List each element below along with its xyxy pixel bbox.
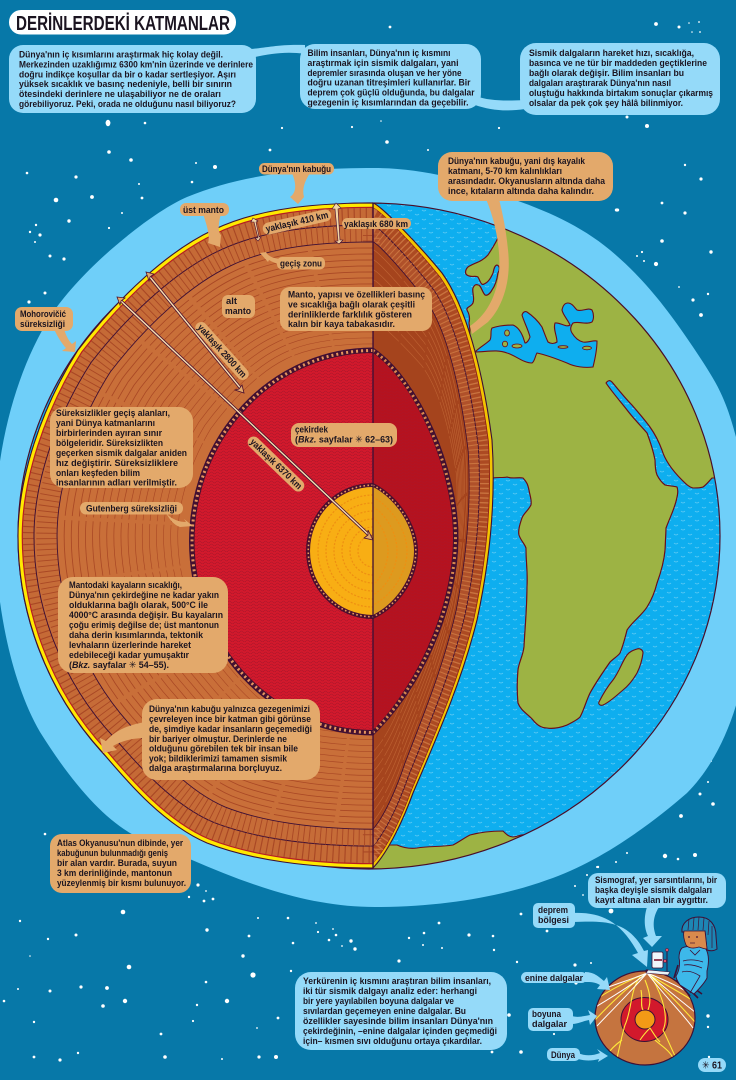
text block: Dünya'nın kabuğu kalınlık [438,152,613,334]
text block: Dünya'nın kabuğu bariyer: de, şimdiye kadar insanların geçemediği [149,723,312,734]
text block: Yerküre sismik dalgalar: için– kısmen sıvı olduğunu ortaya çıkardılar. [303,1035,482,1046]
callout: Gutenberg süreksizliği [80,502,193,527]
text block: intro 2: araştırmak için sismik dalgaları, yani [308,57,458,68]
text block: Dünya'nın kabuğu kalınlık: Dünya'nın kabuğu, yani dış kayalık [448,155,586,166]
callout: Mohorovičić süreksizliği: süreksizliği [20,318,65,329]
text block: intro 2: Bilim insanları, Dünya'nın iç kısmını [308,47,450,58]
arrow: 6370 km radius [117,297,373,540]
arrow: 680 km [332,203,343,244]
text block: intro 2: doğru uzanan titreşimleri kullanırlar. Bir [308,76,471,88]
callout: Mohorovičić süreksizliği [15,307,76,352]
label: yaklaşık 2800 km: yaklaşık 2800 km [196,322,249,380]
cutaway: right wedge [373,203,493,868]
text block: intro 3: olsalar da pek çok şey hâlâ bilinmiyor. [529,97,683,108]
label: çekirdek: (Bkz. sayfalar ✳ 62–63) [295,434,393,444]
text block: manto [280,287,432,331]
Madagascar [599,649,643,705]
text block: süreksizlikler: insanlarının adları verilmiştir. [56,476,177,488]
text block: Dünya'nın kabuğu kalınlık: ince, kıtaların altında daha kalındır. [448,185,594,196]
text block: mantodaki kayalar: olduklarına bağlı olarak, 500°C ile [69,599,208,610]
callout: Dünya [547,1048,608,1062]
text block: süreksizlikler: birbirlerinden ayıran sınır [56,427,162,438]
crossed arms and collar [682,950,703,993]
page number [698,1058,726,1072]
text block: intro 1: yüksek sıcaklık ve basınç nedeniyle, belli bir sınırın [19,78,232,89]
small earth diagram [594,969,695,1065]
text block: Yerküre sismik dalgalar [295,972,507,1050]
wedge lower mantle [373,242,469,829]
text block: Yerküre sismik dalgalar: iki tür sismik dalgayı analiz eder: herhangi [303,985,477,996]
text block: Dünya'nın kabuğu kalınlık: katmanı, 5-70 km kalınlıkları [448,165,562,176]
text block: mantodaki kayalar: çoğu erimiş değilse de; üst mantonun [69,619,219,630]
text block: Dünya'nın kabuğu bariyer: dalga araştırmalarına borçluyuz. [149,762,282,773]
text block: süreksizlikler [50,407,193,488]
inner core [635,1010,655,1029]
text block: manto: ve sıcaklığa bağlı olarak çeşitli [288,298,415,310]
text block: intro 3: Sismik dalgaların hareket hızı, sıcaklığa, [529,47,694,58]
text block: Atlas Okyanusu [50,834,191,893]
text block: manto: Manto, yapısı ve özellikleri basınç [288,288,425,300]
right outer core [373,353,453,730]
page number: ✳ 61 [702,1060,722,1072]
left inner core [310,487,373,615]
callout: geçiş zonu: geçiş zonu [280,258,322,268]
globe outline [18,203,720,869]
connector: intro bubbles 1 to 2 [250,45,305,58]
label: yaklaşık 680 km: yaklaşık 680 km [344,218,408,229]
title [9,10,236,35]
text block: Dünya'nın kabuğu bariyer: bir bariyer olmuştur. Derinlerde ne [149,733,287,744]
callout: üst manto [180,203,229,247]
text block: süreksizlikler: geçerken sismik dalgalar aniden [56,447,187,458]
wedge upper mantle ticks [373,217,484,854]
label: alt manto: alt [226,295,237,306]
text block: intro 1 [9,45,256,113]
cutaway: left hemisphere mantle [18,203,373,868]
text block: mantodaki kayalar: (Bkz. sayfalar ✳ 54–55). [69,659,169,670]
earth disc [595,971,695,1065]
callout: sismograf [588,873,726,947]
callout: boyuna dalgalar: dalgalar [532,1018,567,1029]
white S-waves [594,973,695,1028]
text block: intro 1: Dünya'nın iç kısımlarını araştırmak hiç kolay değil. [19,48,223,60]
hair [682,917,717,951]
connector: intro bubbles 2 to 3 [475,96,525,110]
text block: manto: kalın bir kaya tabakasıdır. [288,318,395,329]
epicentre dot [645,969,649,973]
outer core with Gutenberg boundary band [190,348,458,735]
text block: intro 3: basınca ve ne tür bir maddeden geçtiklerine [529,57,707,68]
text block: mantodaki kayalar [58,577,228,673]
label: çekirdek [291,423,397,447]
globe surface: oceans and continents [17,202,721,870]
label: yaklaşık 6370 km: yaklaşık 6370 km [248,436,305,491]
right inner core [373,487,414,615]
text block: mantodaki kayalar: Mantodaki kayaların sıcaklığı, [69,579,182,590]
text block: Dünya'nın kabuğu kalınlık: arasındadır. Okyanusların altında daha [448,175,606,186]
Antarctica [360,830,524,868]
callout: deprem bölgesi: bölgesi [538,914,569,925]
label: yaklaşık 410 km: yaklaşık 410 km [264,209,329,234]
label: çekirdek: çekirdek [295,424,329,434]
text block: intro 1: ötesindeki derinlere ne ulaşabiliyor ne de oraları [19,88,221,99]
text block: Dünya'nın kabuğu bariyer: yok; bildiklerimizi tamamen sismik [149,752,288,764]
left band [190,348,373,735]
callout: sismograf: kayıt altına alan bir aygıttır. [595,894,708,905]
text block: Dünya'nın kabuğu bariyer: çevreleyen ince bir katman gibi görünse [149,713,311,724]
callout: enine dalgalar: enine dalgalar [525,972,583,983]
Mediterranean and Black Sea [475,303,597,367]
callout: Mohorovičić süreksizliği: Mohorovičić [20,308,66,319]
callout: sismograf: başka deyişle sismik dalgaları [595,884,712,895]
text block: intro 2: depremler sırasında oluşan ve her yöne [308,67,462,78]
label: alt manto [222,295,255,318]
chair [674,965,702,998]
text block: süreksizlikler: onları keşfeden bilim [56,467,140,478]
callout: Gutenberg süreksizliği: Gutenberg süreksizliği [86,502,177,514]
text block: intro 3: dalgaları araştırarak Dünya'nın nasıl [529,77,671,88]
callout: boyuna dalgalar [528,1008,597,1031]
wedge crust [373,203,493,868]
continents: Europe, Asia, Africa [360,230,714,868]
inner core [306,483,418,619]
text block: mantodaki kayalar: levhaların üzerlerinde hareket [69,639,191,650]
callout: Dünya'nın kabuğu [259,163,334,204]
text block: Atlas Okyanusu: kabuğunun bulunmadığı geniş [57,847,168,858]
callout: Dünya'nın kabuğu: Dünya'nın kabuğu [262,163,331,174]
text block: Yerküre sismik dalgalar: bir yere yayılabilen boyuna dalgalar ve [303,995,454,1006]
crust [18,203,373,868]
arrow: 2800 km mantle depth [146,272,244,393]
right band [373,348,458,735]
callout: sismograf: Sismograf, yer sarsıntılarını, bir [595,874,717,885]
Mediterranean islands [502,330,592,350]
text block: süreksizlikler: hız değiştirir. Süreksizliklere [56,457,178,468]
text block: Atlas Okyanusu: Atlas Okyanusu'nun dibinde, yer [57,837,183,848]
text block: intro 1: Merkezinden uzaklığımız 6300 km'nin üzerinde ve derinlere [19,58,253,70]
text block: Yerküre sismik dalgalar: sıvılardan geçemeyen enine dalgalar. Bu [303,1005,466,1016]
callout: boyuna dalgalar: boyuna [532,1008,562,1019]
atmosphere ring [0,168,736,907]
label: alt manto: manto [225,305,251,316]
text block: intro 1: görebiliyoruz. Peki, orada ne olduğunu nasıl biliyoruz? [19,98,236,109]
ocean [18,203,720,869]
text block: intro 3 [520,43,720,115]
yellow P-waves [595,973,695,1060]
text block: intro 2: gezegenin iç kısımlarından da geçebilir. [308,96,468,108]
text block: süreksizlikler: bölgeleridir. Süreksizlikten [56,437,163,448]
callout: deprem bölgesi [533,903,648,967]
callout: geçiş zonu [260,252,325,270]
text block: Atlas Okyanusu: 3 km derinliğinde, mantonun [57,867,172,878]
transition zone [34,225,373,846]
text block: Dünya'nın kabuğu bariyer [100,699,320,780]
text block: intro 3: oluştuğu hakkında birtakım sonuçlar çıkarmış [529,87,713,98]
text block: intro 2: deprem çok güçlü olduğunda, bu dalgalar [308,86,475,98]
text block: mantodaki kayalar: Dünya'nın çekirdeğine ne kadar yakın [69,589,219,600]
text block: Dünya'nın kabuğu bariyer: Dünya'nın kabuğu yalnızca gezegenimizi [149,703,310,714]
scientist figure [674,917,717,998]
body [676,946,708,994]
wedge transition zone [373,225,479,846]
text block: süreksizlikler: Süreksizlikler geçiş alanları, [56,407,170,418]
text block: manto: derinliklerde farklılık gösteren [288,308,412,320]
text block: intro 3: bağlı olarak değişir. Bilim insanları bu [529,67,684,78]
callout: enine dalgalar [521,972,610,990]
text block: Yerküre sismik dalgalar: çekirdeğinin, –enine dalgalar içinden geçmediği [303,1025,497,1036]
text block: mantodaki kayalar: edebileceği kadar yumuşaktır [69,649,189,660]
left outer core [195,353,373,730]
callout: Dünya: Dünya [551,1049,576,1060]
callout: üst manto: üst manto [183,204,224,215]
text block: Atlas Okyanusu: bir alan vardır. Burada, suyun [57,857,177,868]
land texture [465,238,712,729]
text block: Yerküre sismik dalgalar: özellikler sayesinde bilim insanları Dünya'nın [303,1015,493,1026]
seismograph device [646,948,670,975]
text block: mantodaki kayalar: 4000°C arasında değişir. Bu kayaların [69,609,223,620]
face [684,931,707,949]
outer core [621,998,668,1042]
upper mantle ticks [29,217,373,854]
lower mantle [57,242,373,829]
hair strands [688,917,712,948]
centre cut line [372,203,374,868]
text block: mantodaki kayalar: daha derin kısımlarında, tektonik [69,629,204,640]
title: DERİNLERDEKİ KATMANLAR [16,12,230,35]
text block: intro 2 [300,44,481,109]
arrow: 410 km [251,218,261,241]
text block: süreksizlikler: yani Dünya katmanlarını [56,417,155,428]
text block: intro 1: doğru indikçe koşullar da bir o kadar sertleşiyor. Aşırı [19,68,236,80]
text block: Dünya'nın kabuğu bariyer: olduğunu görebilen tek bir insan bile [149,742,298,754]
text block: Yerküre sismik dalgalar: Yerkürenin iç kısmını araştıran bilim insanları, [303,975,491,986]
text block: Atlas Okyanusu: yüzeylenmiş bir kısmı bulunuyor. [57,877,186,888]
callout: deprem bölgesi: deprem [538,904,568,915]
